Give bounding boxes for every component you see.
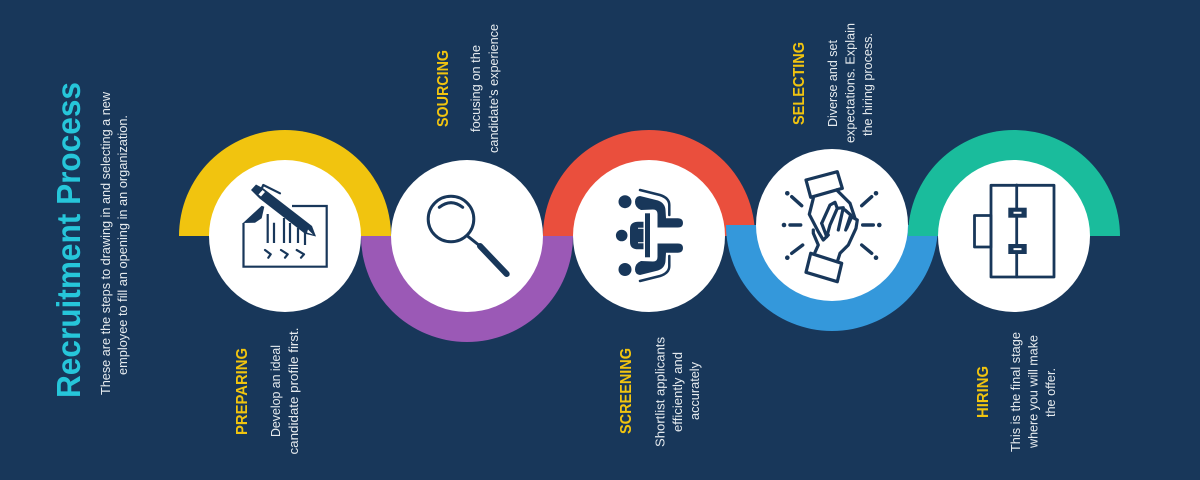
label: preparing: Develop an ideal — [268, 345, 283, 437]
circle: sourcing — [391, 160, 543, 312]
label: preparing — [234, 328, 301, 454]
label: sourcing: candidate's experience — [486, 24, 501, 153]
intro text: employee to fill an opening in an organization. — [115, 115, 130, 375]
icon: document and pen — [243, 184, 327, 267]
intro text — [98, 92, 130, 395]
label: screening — [618, 337, 702, 447]
circle: selecting — [756, 149, 908, 301]
icon: briefcase — [974, 185, 1054, 277]
label: sourcing — [435, 24, 501, 153]
label: selecting: SELECTING — [791, 42, 808, 125]
label: selecting: expectations. Explain — [842, 23, 858, 143]
icon: magnifying glass — [428, 196, 507, 274]
label: screening: efficiently and — [670, 352, 685, 432]
label: selecting: Diverse and set — [825, 40, 840, 127]
label: hiring: This is the final stage — [1008, 332, 1023, 452]
label: sourcing: SOURCING — [435, 50, 452, 127]
arc: screening — [543, 130, 755, 236]
label: screening: SCREENING — [618, 348, 635, 434]
label: selecting — [791, 23, 875, 143]
icon: handshake — [782, 172, 882, 282]
arc: selecting — [726, 225, 938, 331]
label: hiring: the offer. — [1043, 368, 1058, 417]
label: hiring: where you will make — [1026, 335, 1040, 449]
arc: sourcing — [361, 236, 573, 342]
arc: hiring — [908, 130, 1120, 236]
label: screening: Shortlist applicants — [652, 337, 668, 447]
circle: preparing — [209, 160, 361, 312]
title: Recruitment Process — [50, 82, 87, 398]
arc: preparing — [179, 130, 391, 236]
label: screening: accurately — [687, 362, 702, 420]
circle: screening — [573, 160, 725, 312]
label: selecting: the hiring process. — [860, 33, 875, 136]
circle: hiring — [938, 160, 1090, 312]
intro text: These are the steps to drawing in and selecting a new — [98, 92, 113, 395]
icon: meeting table — [616, 190, 683, 281]
label: preparing: candidate profile first. — [286, 328, 301, 454]
label: hiring — [975, 332, 1058, 452]
label: hiring: HIRING — [975, 366, 992, 418]
label: sourcing: focusing on the — [468, 45, 483, 132]
label: preparing: PREPARING — [234, 348, 251, 435]
